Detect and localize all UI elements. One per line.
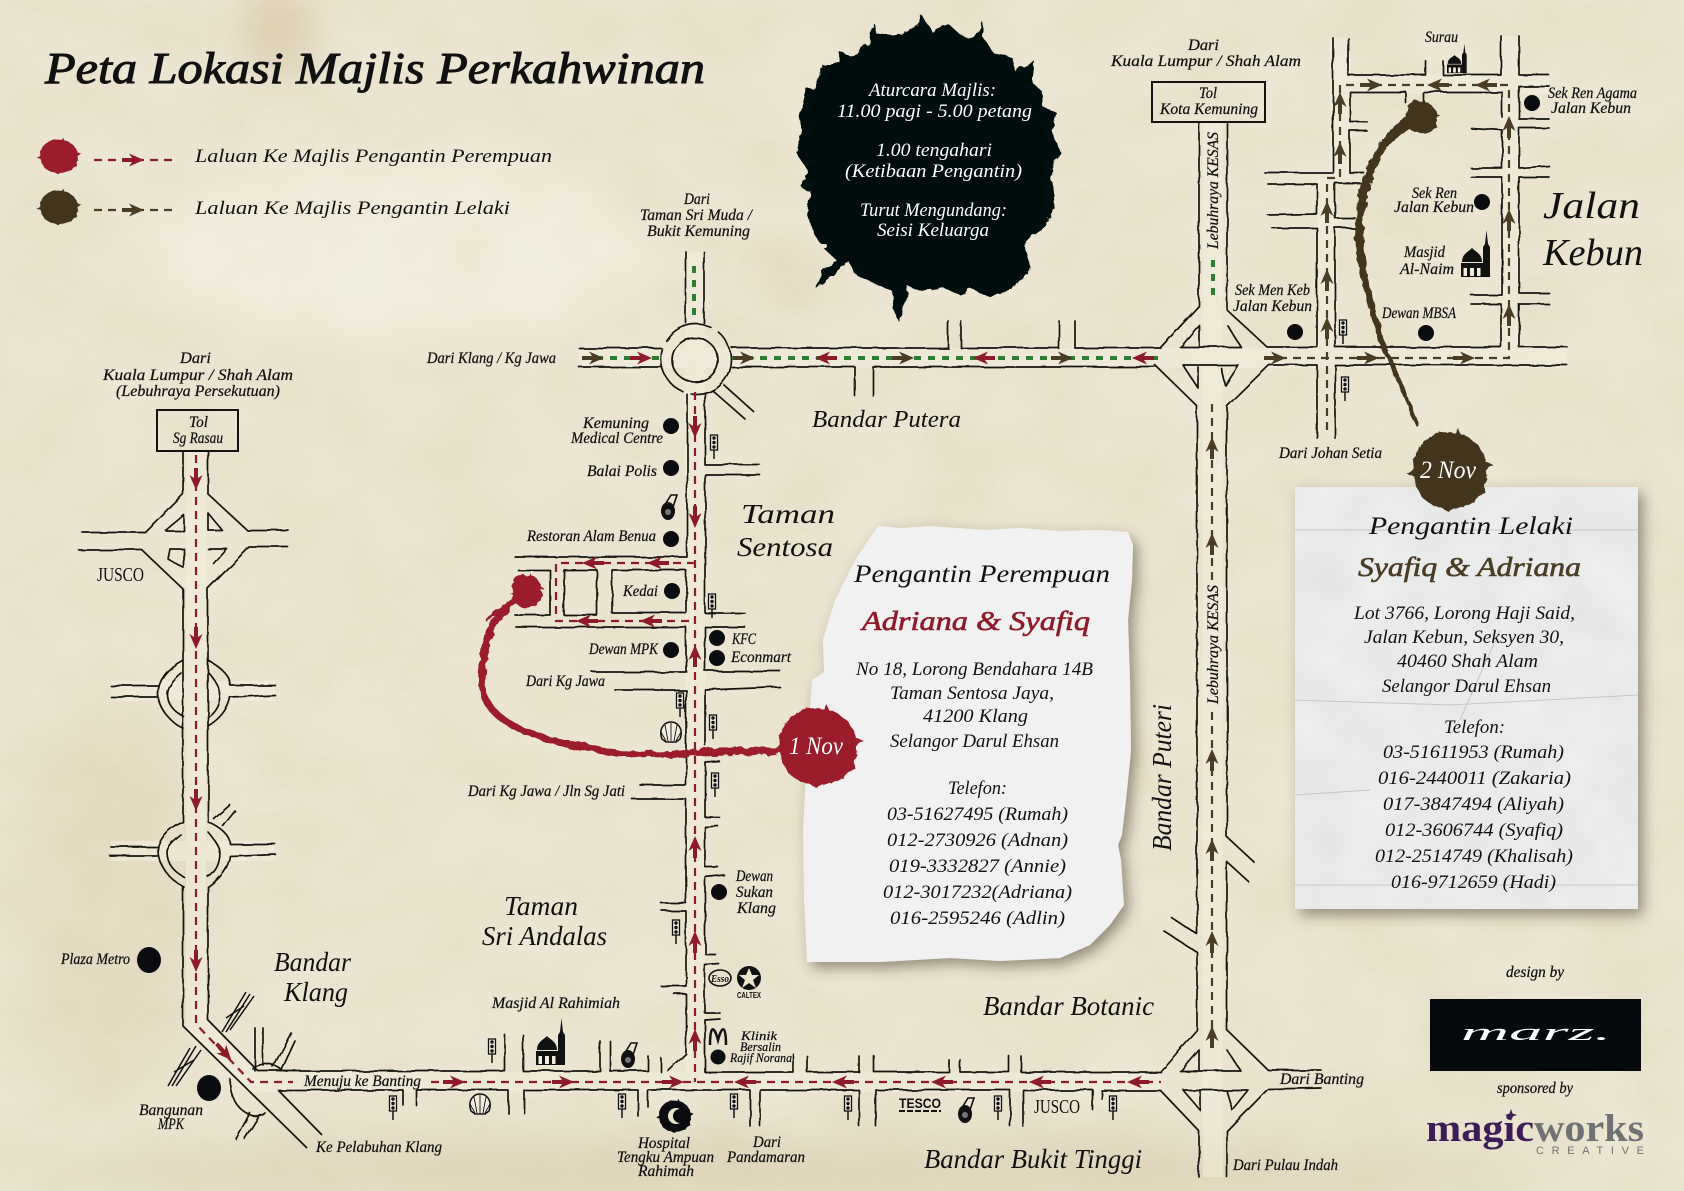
programme text: (Ketibaan Pengantin): [845, 161, 1022, 182]
district: Taman Sri Andalas: Sri Andalas: [482, 921, 607, 951]
route: bride (red): [190, 392, 1161, 1088]
icon: Caltex: [737, 966, 762, 1000]
landmark: Bangunan MPK: Bangunan: [139, 1102, 203, 1119]
landmark: Dewan Sukan Klang: Klang: [736, 900, 776, 917]
toll box: Sg Rasau: Sg Rasau: [173, 430, 223, 447]
icon: Esso: Esso: [710, 974, 729, 985]
landmark: Masjid Al Rahimiah: Masjid Al Rahimiah: [491, 995, 620, 1012]
toll box: Kota Kemuning: Tol: [1199, 85, 1218, 102]
landmark: Restoran Alam Benua: Restoran Alam Benua: [526, 528, 656, 545]
icons: shell: [470, 722, 681, 1114]
address: Selangor Darul Ehsan: [1382, 676, 1551, 697]
phone numbers: 012-3017232(Adriana): [883, 882, 1072, 903]
district: Bandar Bukit Tinggi: Bandar Bukit Tinggi: [924, 1144, 1142, 1174]
title: Peta Lokasi Majlis Perkahwinan: [44, 44, 705, 93]
programme text: Turut Mengundang:: [860, 200, 1007, 221]
legend: bride route: Laluan Ke Majlis Pengantin Perempuan: [194, 146, 552, 167]
credit: sponsored by: [1426, 1080, 1644, 1157]
legend: [37, 138, 552, 225]
district: Bandar Klang: [274, 947, 351, 1007]
landmark: Kedai: Kedai: [622, 583, 658, 600]
landmark: Sek Ren Jalan Kebun: Jalan Kebun: [1394, 199, 1474, 216]
panel: bride: [803, 526, 1133, 962]
landmark: Klinik Bersalin: Rajif Norana: [729, 1050, 792, 1065]
phone numbers: 019-3332827 (Annie): [889, 856, 1066, 877]
label: Dari KL Persekutuan: [102, 350, 293, 400]
ink trail: bride: [482, 573, 775, 754]
landmark: Dewan MBSA: [1381, 305, 1456, 341]
phone numbers: 016-9712659 (Hadi): [1391, 872, 1556, 893]
address: 40460 Shah Alam: [1397, 651, 1538, 672]
landmark: Econmart: Econmart: [730, 649, 792, 666]
label: Dari Klang: Dari Klang / Kg Jawa: [426, 350, 556, 367]
label: Dari Pandamaran: Pandamaran: [726, 1149, 805, 1166]
label: Dari KL Persekutuan: (Lebuhraya Persekutuan): [116, 383, 280, 400]
landmark: Sek Ren Jalan Kebun: [1394, 185, 1490, 216]
date blot: 2 Nov: 2 Nov: [1420, 457, 1477, 484]
landmark: Sek Ren Agama: [1524, 85, 1637, 117]
logo: magicworks: works: [1534, 1107, 1644, 1150]
toll box: Sg Rasau: [157, 410, 238, 451]
phone numbers: 012-3606744 (Syafiq): [1385, 820, 1563, 841]
icon: Esso: [709, 970, 731, 986]
landmark: Masjid Al-Naim: [1399, 230, 1490, 278]
district: Jalan Kebun: Kebun: [1542, 232, 1643, 274]
district: Bandar Botanic: Bandar Botanic: [983, 991, 1154, 1021]
label: Dari KL KESAS: [1110, 37, 1301, 70]
date blot: 1 Nov: [772, 704, 863, 787]
landmark: Hospital: Hospital: [637, 1135, 691, 1152]
toll box: Sg Rasau: Tol: [189, 414, 209, 431]
landmark: Klinik Bersalin: [710, 1028, 792, 1065]
date blot: 2 Nov: [1406, 428, 1493, 511]
landmark: Surau: [1425, 29, 1467, 73]
route: shared (green): [582, 260, 1213, 364]
landmark: Sek Men Keb: Jalan Kebun: [1233, 298, 1312, 315]
district: Bandar Putera: Bandar Putera: [812, 407, 961, 433]
landmark: Kemuning Medical Centre: Kemuning: [582, 415, 649, 432]
district: Bandar Klang: Bandar: [274, 947, 351, 977]
label: Dari KL Persekutuan: Dari: [179, 350, 211, 367]
landmark: Klinik Bersalin: Klinik: [740, 1028, 777, 1043]
landmark: Plaza Metro: Plaza Metro: [60, 951, 130, 968]
phone numbers: 017-3847494 (Aliyah): [1383, 794, 1564, 815]
programme text: Aturcara Majlis:: [867, 80, 996, 101]
phone numbers: [883, 778, 1072, 929]
landmark: Dewan Sukan Klang: Sukan: [736, 884, 773, 901]
landmark: Hospital: Tengku Ampuan: [617, 1149, 714, 1166]
label: Dari KL Persekutuan: Kuala Lumpur / Shah Alam: [102, 367, 293, 384]
label: Dari KL KESAS: Dari: [1187, 37, 1219, 54]
landmark: Klinik Bersalin: Bersalin: [740, 1039, 781, 1054]
legend: groom route: [37, 189, 510, 225]
landmark: Dewan Sukan Klang: [711, 868, 776, 917]
icon: JUSCO bottom: JUSCO: [1034, 1096, 1080, 1118]
label: Dari Pandamaran: Dari: [752, 1134, 781, 1151]
district: Bandar Puteri: Bandar Puteri: [1147, 704, 1177, 851]
legend: groom route: Laluan Ke Majlis Pengantin Lelaki: [194, 198, 510, 219]
label: Dari Taman Sri Muda: Bukit Kemuning: [647, 223, 750, 240]
toll box: Kota Kemuning: [1152, 82, 1265, 122]
label: Dari Pandamaran: [726, 1134, 805, 1166]
landmark: Hospital: Rahimah: [637, 1163, 694, 1180]
phone numbers: 012-2514749 (Khalisah): [1375, 846, 1573, 867]
address: [855, 659, 1093, 752]
icons: traffic lights: [390, 320, 1348, 1120]
panel heading: Pengantin Perempuan: [853, 561, 1110, 588]
route: groom (brown): [1206, 78, 1516, 1048]
label: Dari Taman Sri Muda: Dari: [683, 191, 710, 208]
label: Dari Taman Sri Muda: [640, 191, 754, 240]
landmark: Bangunan MPK: [139, 1075, 221, 1133]
landmark: Kemuning Medical Centre: Medical Centre: [570, 430, 663, 447]
landmark: Kedai: [622, 583, 680, 600]
phone numbers: [1375, 717, 1573, 893]
label: Dari Banting: Dari Banting: [1279, 1071, 1364, 1088]
legend: bride route: [37, 138, 552, 174]
road: Menuju ke Banting: [230, 1028, 1161, 1139]
landmark: Sek Men Keb: [1233, 282, 1312, 340]
date blot: 1 Nov: 1 Nov: [789, 733, 844, 760]
road label: Menuju ke Banting: Menuju ke Banting: [303, 1073, 421, 1090]
phone numbers: 03-51627495 (Rumah): [887, 804, 1068, 825]
credit: sponsored by: sponsored by: [1497, 1080, 1574, 1097]
landmark: Sek Ren Agama: Jalan Kebun: [1551, 100, 1631, 117]
landmark: KFC: KFC: [731, 631, 756, 648]
label: Dari Johan Setia: Dari Johan Setia: [1278, 445, 1382, 462]
couple names: Adriana & Syafiq: [860, 606, 1090, 636]
programme text: [837, 80, 1032, 241]
panel heading: Pengantin Lelaki: [1368, 513, 1573, 540]
district: Taman Sentosa: Sentosa: [737, 532, 833, 562]
road labels: Lebuhraya KESAS north: Lebuhraya KESAS: [1205, 132, 1222, 250]
label: Dari KL KESAS: Kuala Lumpur / Shah Alam: [1110, 53, 1301, 70]
label: Dari Taman Sri Muda: Taman Sri Muda /: [640, 207, 754, 224]
landmark: Balai Polis: [587, 460, 679, 480]
road: Lebuhraya Persekutuan: [79, 451, 505, 1147]
icon: JUSCO left: JUSCO: [97, 564, 144, 586]
ink trail: groom: [1359, 100, 1440, 424]
road: Taman Sentosa main: [515, 252, 1161, 1072]
programme text: Seisi Keluarga: [877, 220, 989, 241]
label: Dari Kg Jawa: Dari Kg Jawa: [525, 673, 605, 690]
icon: Tesco: TESCO: [899, 1095, 941, 1111]
landmark: Dewan MBSA: Dewan MBSA: [1381, 305, 1456, 322]
landmark: KFC: [709, 630, 756, 648]
landmark: Bangunan MPK: MPK: [157, 1116, 185, 1133]
district: Jalan Kebun: Jalan: [1543, 185, 1640, 227]
phone numbers: 012-2730926 (Adnan): [887, 830, 1068, 851]
railway hatching: [168, 992, 254, 1086]
district: Taman Sri Andalas: Taman: [504, 891, 578, 921]
landmark: Hospital: [617, 1099, 714, 1180]
landmark: Plaza Metro: [60, 947, 161, 973]
landmark: Masjid Al-Naim: Masjid: [1403, 244, 1446, 261]
panel: groom: [1295, 487, 1638, 909]
district: Taman Sentosa: [737, 499, 835, 562]
icons: petrol stations: [621, 495, 974, 1123]
address: Selangor Darul Ehsan: [890, 731, 1059, 752]
icon: McDonald's: [710, 1029, 726, 1045]
label: Dari Pulau Indah: Dari Pulau Indah: [1232, 1157, 1338, 1174]
address: 41200 Klang: [923, 706, 1028, 727]
landmark: Kemuning Medical Centre: [570, 415, 679, 447]
landmark: Balai Polis: Balai Polis: [587, 463, 657, 480]
credit: design by: marz.: [1461, 1020, 1611, 1046]
district: Bandar Klang: Klang: [283, 977, 348, 1007]
road: KESAS: [1155, 36, 1567, 1177]
logo: magicworks: CREATIVE: [1536, 1145, 1644, 1157]
logo: magicworks: magic: [1426, 1107, 1534, 1150]
roundabout: [661, 324, 731, 394]
district: Taman Sentosa: Taman: [741, 499, 835, 529]
couple names: Syafiq & Adriana: [1358, 552, 1581, 582]
icon: Caltex: CALTEX: [737, 991, 762, 1000]
programme text: 1.00 tengahari: [876, 140, 992, 161]
phone numbers: Telefon:: [1444, 717, 1505, 738]
credit: design by: design by: [1506, 964, 1565, 981]
landmark: Surau: Surau: [1425, 29, 1458, 46]
address: No 18, Lorong Bendahara 14B: [855, 659, 1093, 680]
toll box: Kota Kemuning: Kota Kemuning: [1159, 101, 1258, 118]
landmark: Dewan MPK: Dewan MPK: [588, 641, 659, 658]
phone numbers: 016-2595246 (Adlin): [890, 908, 1065, 929]
district: Taman Sri Andalas: [482, 891, 607, 951]
landmark: Sek Men Keb: Sek Men Keb: [1235, 282, 1310, 299]
credit: design by: [1430, 964, 1641, 1071]
road labels: Lebuhraya KESAS south: Lebuhraya KESAS: [1205, 585, 1222, 705]
phone numbers: 03-51611953 (Rumah): [1383, 742, 1564, 763]
landmark: Masjid Al Rahimiah: [491, 995, 620, 1065]
landmark: Sek Ren Agama: Sek Ren Agama: [1548, 85, 1637, 102]
phone numbers: 016-2440011 (Zakaria): [1378, 768, 1571, 789]
address: Lot 3766, Lorong Haji Said,: [1353, 603, 1575, 624]
address: Jalan Kebun, Seksyen 30,: [1364, 627, 1564, 648]
logo: magicworks: [1426, 1107, 1644, 1157]
phone numbers: Telefon:: [948, 778, 1007, 799]
landmark: Sek Ren Jalan Kebun: Sek Ren: [1412, 185, 1457, 202]
landmark: Dewan Sukan Klang: Dewan: [735, 868, 773, 885]
district: Jalan Kebun: [1542, 185, 1643, 274]
address: [1353, 603, 1575, 697]
programme text: 11.00 pagi - 5.00 petang: [837, 101, 1032, 122]
landmark: Masjid Al-Naim: Al-Naim: [1399, 261, 1454, 278]
ink blot: programme: [795, 17, 1059, 321]
address: Taman Sentosa Jaya,: [890, 683, 1054, 704]
label: Ke Pelabuhan Klang: Ke Pelabuhan Klang: [315, 1139, 442, 1156]
label: Dari Kg Jawa / Jln Sg Jati: Dari Kg Jawa / Jln Sg Jati: [467, 783, 625, 800]
